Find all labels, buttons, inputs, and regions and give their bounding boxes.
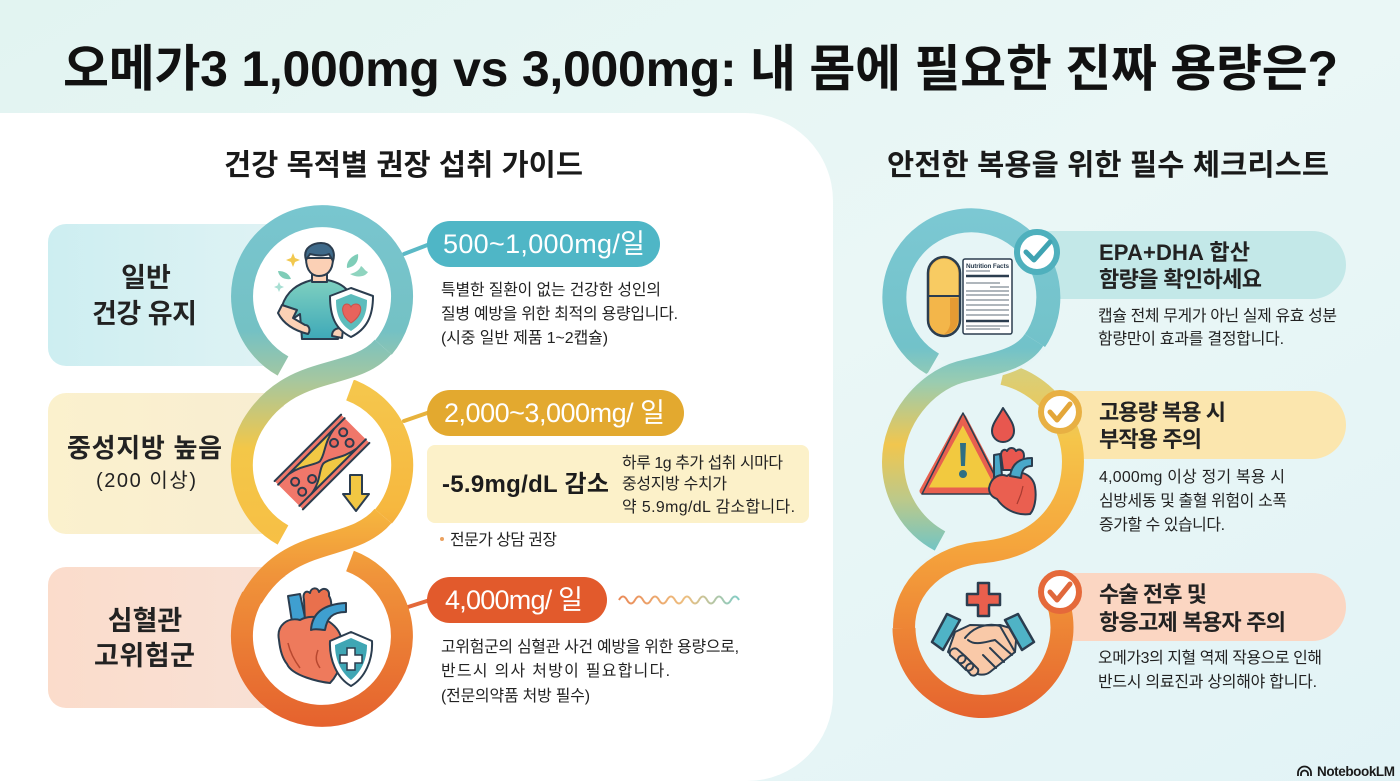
label box: general health: 건강 유지 bbox=[92, 299, 197, 329]
connector lines bbox=[404, 244, 430, 607]
heading: guide: 건강 목적별 권장 섭취 가이드 bbox=[224, 149, 583, 182]
icon: heart with shield bbox=[279, 588, 372, 686]
pill: 500~1,000mg: 500~1,000mg/일 bbox=[443, 229, 645, 259]
checklist item 3 text: 항응고제 복용자 주의 bbox=[1099, 610, 1286, 635]
text: general description: (시중 일반 제품 1~2캡슐) bbox=[441, 329, 608, 347]
checklist item 3 text bbox=[1098, 582, 1322, 691]
label box: high triglycerides: (200 이상) bbox=[96, 469, 196, 492]
checklist item 1 text: 캡슐 전체 무게가 아닌 실제 유효 성분 bbox=[1098, 307, 1337, 325]
icon: cross and handshake bbox=[932, 583, 1034, 676]
checklist item 2 text bbox=[1099, 400, 1287, 534]
text: high risk description: (전문의약품 처방 필수) bbox=[441, 687, 590, 705]
text: general description: 특별한 질환이 없는 건강한 성인의 bbox=[441, 281, 661, 299]
badge: check yellow bbox=[1041, 393, 1079, 431]
text: general description bbox=[441, 281, 678, 347]
badge: check orange bbox=[1041, 573, 1079, 611]
text: high risk description: 반드시 의사 처방이 필요합니다. bbox=[441, 662, 670, 680]
icon: person with shield bbox=[274, 243, 373, 339]
icon: capsule and nutrition label bbox=[928, 257, 1012, 336]
callout: reduction: 중성지방 수치가 bbox=[622, 475, 727, 493]
left ribbon rings bbox=[242, 216, 402, 716]
checklist item 1 text: 함량만이 효과를 결정합니다. bbox=[1098, 330, 1284, 348]
icon: capsule and nutrition label: Nutrition Facts bbox=[966, 263, 1009, 270]
callout: reduction bbox=[427, 445, 809, 523]
badge: check teal bbox=[1017, 232, 1057, 272]
pill: 2,000~3,000mg: 2,000~3,000mg/ 일 bbox=[444, 398, 665, 428]
panel: safety checklist bbox=[887, 149, 1346, 707]
callout: reduction: -5.9mg/dL 감소 bbox=[442, 471, 609, 498]
checklist item 2 text: 증가할 수 있습니다. bbox=[1099, 516, 1225, 534]
checklist item 1 text: 함량을 확인하세요 bbox=[1099, 267, 1262, 292]
label box: general health bbox=[48, 224, 288, 366]
watermark: NotebookLM: NotebookLM bbox=[1317, 764, 1395, 779]
right ribbon rings bbox=[893, 220, 1073, 707]
checklist item 2 text: 부작용 주의 bbox=[1099, 427, 1202, 452]
checklist item 3 text: 오메가3의 지혈 역제 작용으로 인해 bbox=[1098, 649, 1322, 667]
pill: 2,000~3,000mg bbox=[427, 390, 684, 436]
checklist item 1 text: EPA+DHA 합산 bbox=[1099, 240, 1250, 265]
note: consult expert: 전문가 상담 권장 bbox=[450, 531, 557, 549]
icon: artery with plaque bbox=[275, 415, 369, 511]
header pill backgrounds bbox=[1030, 231, 1346, 641]
wave line bbox=[619, 596, 739, 604]
title: 오메가3 1,000mg vs 3,000mg: 내 몸에 필요한 진짜 용량은? bbox=[63, 41, 1338, 97]
pill: 4,000mg: 4,000mg/ 일 bbox=[445, 585, 583, 615]
pill: 500~1,000mg bbox=[427, 221, 660, 267]
checklist item 1 text bbox=[1098, 240, 1337, 348]
checklist item 2 text: 심방세동 및 출혈 위험이 소폭 bbox=[1099, 492, 1287, 510]
label box: general health: 일반 bbox=[121, 263, 171, 293]
checklist item 3 text: 반드시 의료진과 상의해야 합니다. bbox=[1098, 673, 1317, 691]
checklist item 2 text: 고용량 복용 시 bbox=[1099, 400, 1226, 425]
text: high risk description bbox=[441, 638, 739, 705]
panel: health goal guide bbox=[0, 113, 833, 781]
text: general description: 질병 예방을 위한 최적의 용량입니다. bbox=[441, 305, 678, 323]
text: high risk description: 고위험군의 심혈관 사건 예방을 위한 용량으로, bbox=[441, 638, 739, 656]
checklist item 3 text: 수술 전후 및 bbox=[1099, 582, 1207, 607]
icon: warning and heart bbox=[922, 408, 1036, 514]
label box: cardiovascular high risk: 고위험군 bbox=[94, 641, 195, 671]
label box: cardiovascular high risk bbox=[48, 567, 288, 708]
callout: reduction: 하루 1g 추가 섭취 시마다 bbox=[622, 454, 783, 472]
label box: cardiovascular high risk: 심혈관 bbox=[108, 606, 182, 636]
label box: high triglycerides bbox=[48, 393, 288, 534]
pill: 4,000mg bbox=[427, 577, 607, 623]
label box: high triglycerides: 중성지방 높음 bbox=[67, 433, 222, 463]
heading: checklist: 안전한 복용을 위한 필수 체크리스트 bbox=[887, 149, 1329, 182]
callout: reduction: 약 5.9mg/dL 감소합니다. bbox=[622, 498, 795, 516]
checklist item 2 text: 4,000mg 이상 정기 복용 시 bbox=[1099, 468, 1285, 486]
